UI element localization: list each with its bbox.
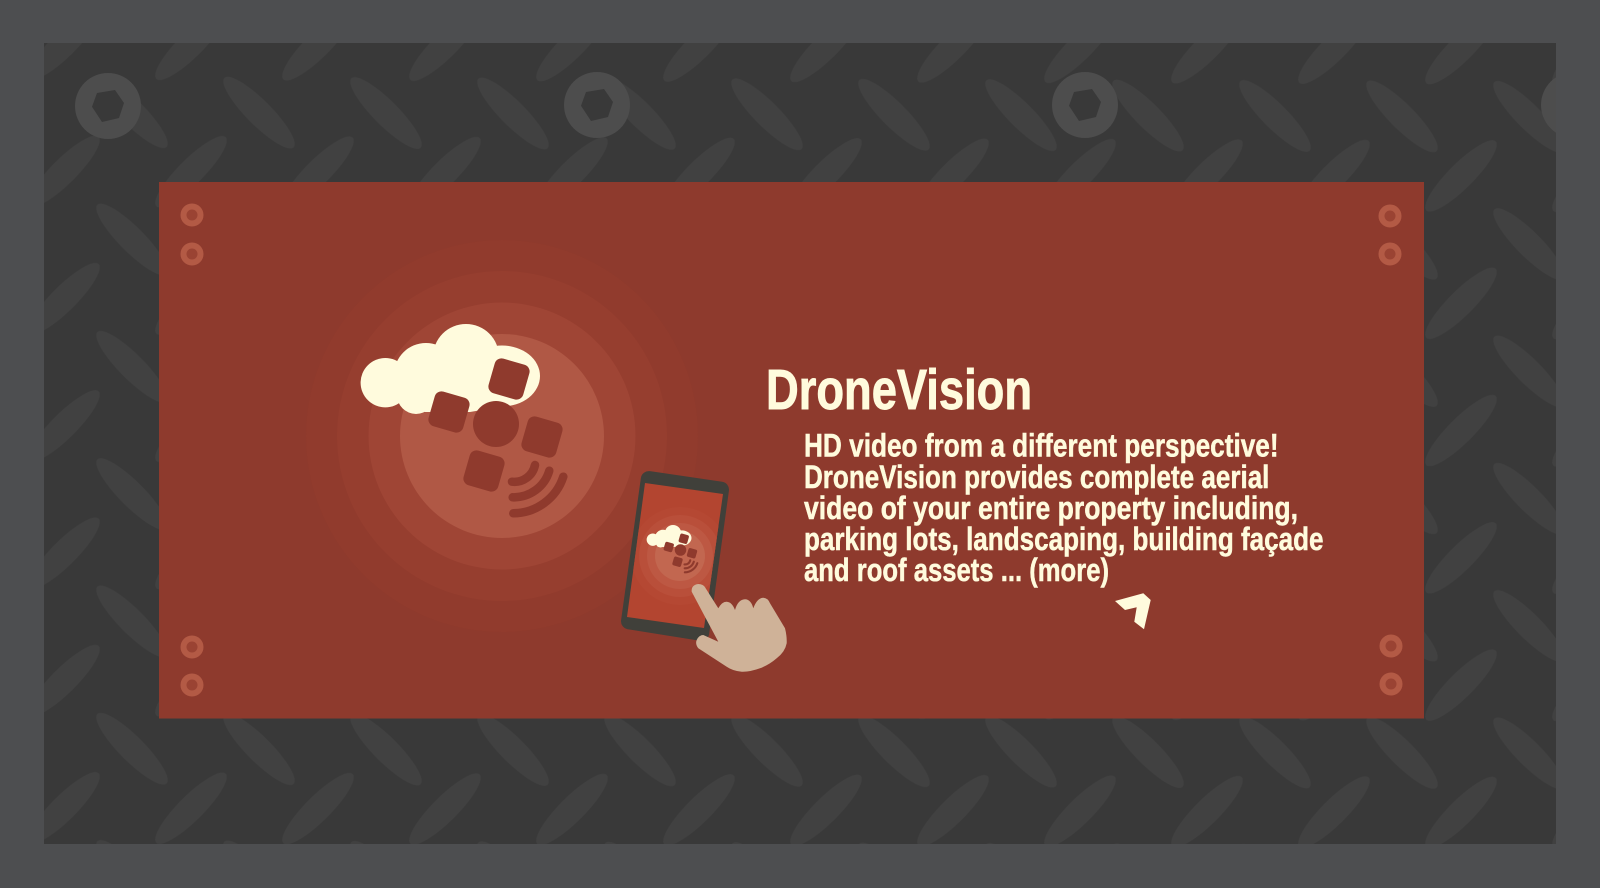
bolt 3 <box>1052 72 1118 138</box>
bolt 4 <box>1541 78 1556 132</box>
body text: parking lots, landscaping, building façade <box>804 521 1324 557</box>
phone body <box>629 479 721 633</box>
body text: video of your entire property including, <box>804 490 1298 526</box>
icon: cloud and drone <box>361 324 564 513</box>
icon: phone <box>627 479 729 633</box>
body text <box>804 428 1324 588</box>
phone screen <box>627 483 723 628</box>
bolt 2 <box>564 72 630 138</box>
title: DroneVision <box>766 358 1032 422</box>
body text: HD video from a different perspective! <box>804 428 1279 464</box>
body text: and roof assets ... (more) <box>804 552 1109 588</box>
screen glow circles <box>633 515 718 597</box>
large hex bolts <box>75 72 1600 139</box>
concentric glow circles <box>306 240 698 632</box>
panel screws <box>184 206 1400 694</box>
bolt 1 <box>75 73 141 139</box>
panel: DroneVision <box>159 182 1424 718</box>
icon: pointing hand <box>692 584 787 672</box>
body text: DroneVision provides complete aerial <box>804 459 1269 495</box>
mini drone icon <box>647 525 698 572</box>
icon: cursor arrow <box>1115 593 1151 629</box>
